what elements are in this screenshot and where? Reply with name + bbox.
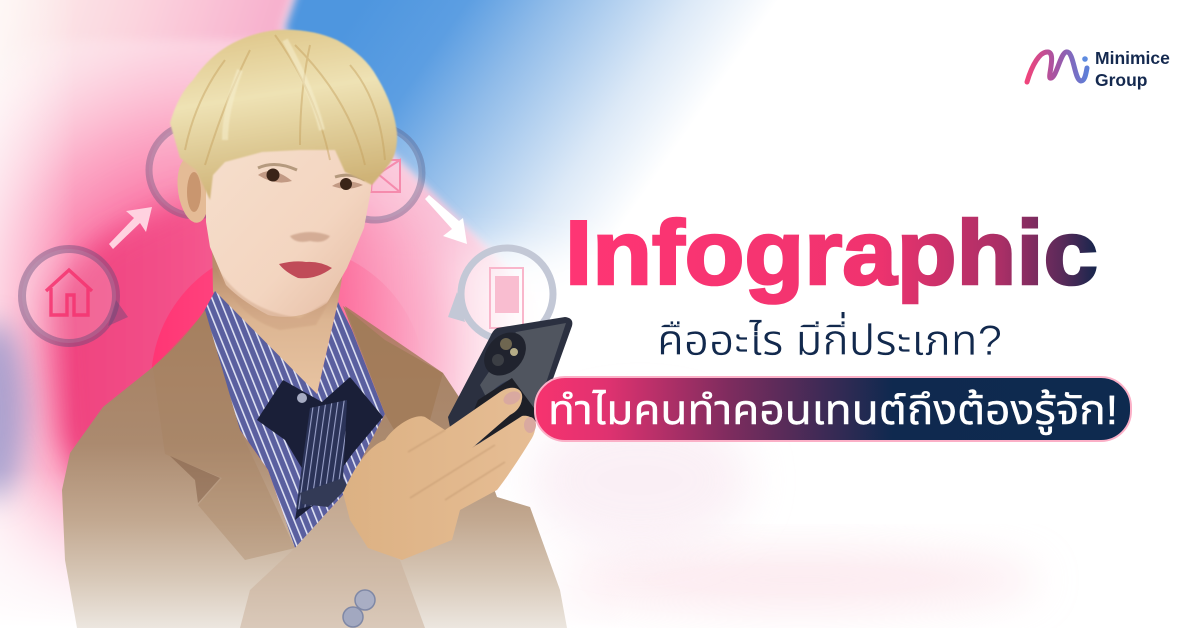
icon: phone bubble [448,248,553,340]
logo mark [1027,52,1088,82]
icon: second bubble ring [149,124,241,216]
logo text: Minimice [1095,48,1170,68]
logo [1027,48,1170,90]
coat [62,306,567,628]
nose [290,232,330,242]
phone [448,317,572,453]
buttons [343,590,375,627]
coat sleeve fold [240,495,425,628]
neck [212,240,345,394]
lips [279,261,332,278]
fingernails [501,389,536,433]
arrow: mail to phone bubble [425,195,467,244]
callout pill [535,377,1131,441]
pink disc behind person [151,245,425,519]
tie [296,400,347,510]
shirt button [297,393,307,403]
hand [343,388,535,560]
icon: mail bubble [328,126,422,220]
face [206,130,375,317]
brows and eyes [258,164,365,190]
lapels [153,312,295,560]
hair [170,30,397,200]
icon: home bubble [22,249,128,343]
person [62,30,572,628]
arrow: home to second bubble [109,207,152,249]
collar shadow [257,377,383,520]
chin shadow [214,262,330,330]
callout pill: ทำไมคนทำคอนเทนต์ถึงต้องรู้จัก! [548,387,1118,435]
logo text: Group [1095,70,1148,90]
striped shirt [202,291,385,548]
subtitle: คืออะไร มีกี่ประเภท? [657,311,1002,365]
ear [174,155,212,225]
title: Infographic [565,203,1098,304]
